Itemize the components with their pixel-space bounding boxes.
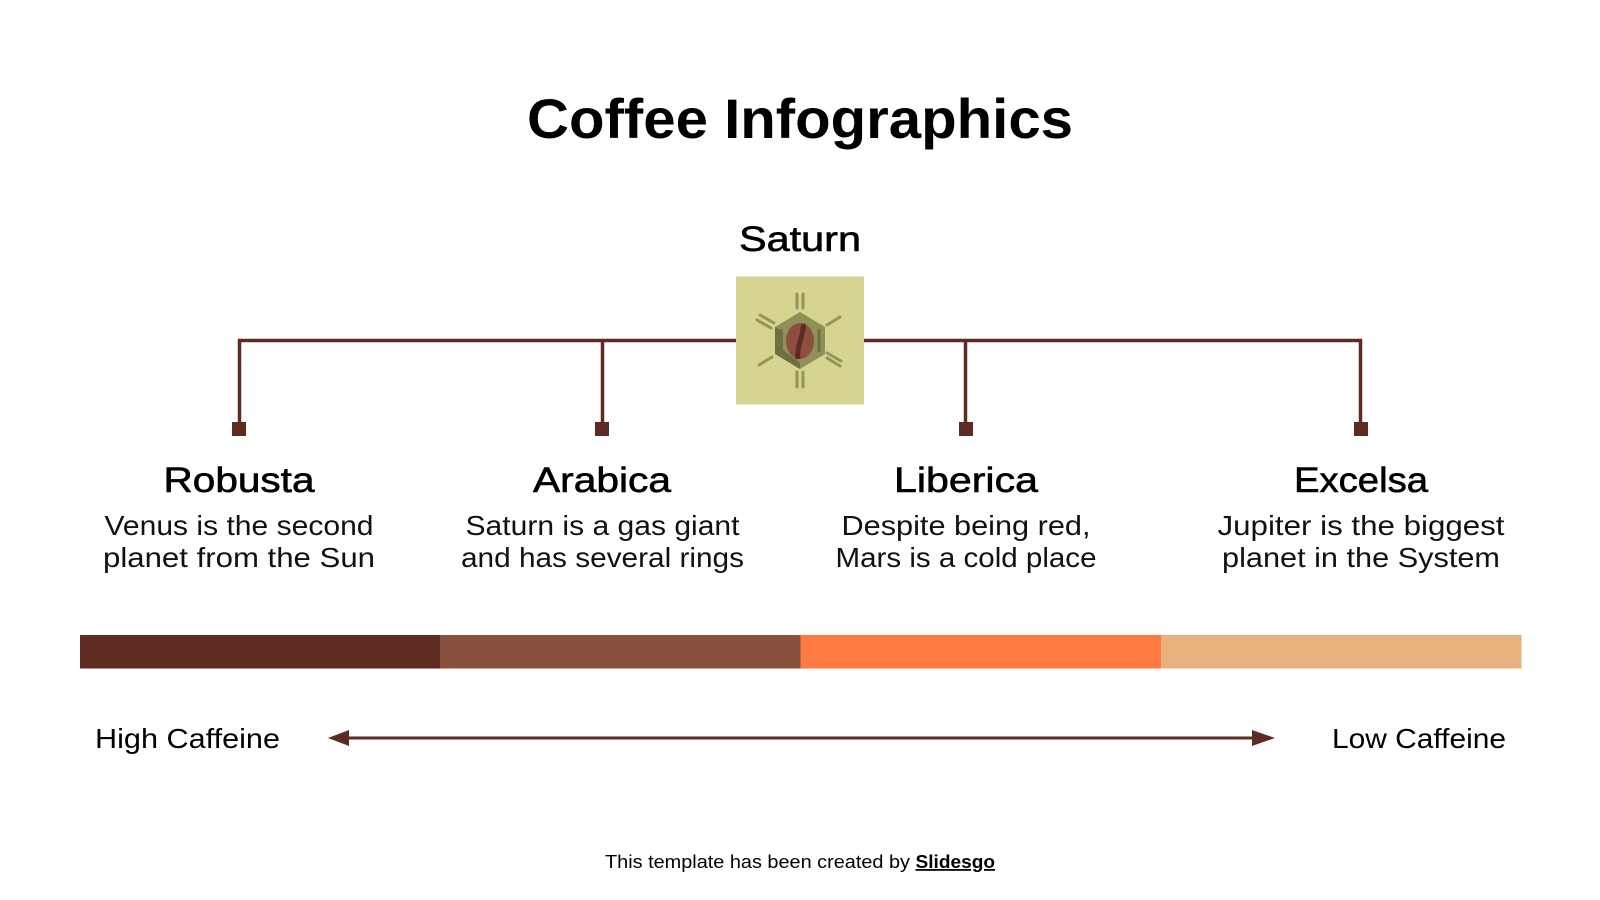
marker: Liberica (959, 422, 973, 436)
column: Arabica: and has several rings (461, 542, 744, 573)
marker: Robusta (232, 422, 246, 436)
column: Liberica: Mars is a cold place (836, 542, 1096, 573)
column: Excelsa (1218, 461, 1505, 573)
marker: Excelsa (1354, 422, 1368, 436)
column: Robusta: Venus is the second (104, 510, 374, 541)
column: Excelsa: Jupiter is the biggest (1218, 510, 1505, 541)
column: Liberica: Despite being red, (842, 510, 1090, 541)
column: Arabica (461, 461, 744, 573)
icon: coffee bean tile (736, 276, 864, 404)
column: Robusta (103, 461, 375, 573)
caffeine scale bar (80, 635, 1522, 668)
label: High Caffeine: High Caffeine (95, 723, 280, 754)
column: Robusta: Robusta (164, 461, 315, 500)
heading: Saturn: Saturn (739, 220, 861, 259)
column: Liberica (836, 461, 1096, 573)
marker: Arabica (595, 422, 609, 436)
column: Excelsa: planet in the System (1222, 542, 1500, 573)
column: Arabica: Saturn is a gas giant (466, 510, 740, 541)
footer credit: This template has been created by (605, 852, 910, 872)
column: Liberica: Liberica (894, 461, 1039, 500)
column: Arabica: Arabica (533, 461, 672, 500)
label: Low Caffeine: Low Caffeine (1332, 723, 1506, 754)
title: Coffee Infographics (527, 87, 1073, 150)
column: Excelsa: Excelsa (1294, 461, 1429, 500)
footer credit: Slidesgo (916, 852, 995, 872)
arrow: caffeine direction (328, 730, 1275, 746)
connector lines (240, 340, 1360, 422)
column: Robusta: planet from the Sun (103, 542, 375, 573)
